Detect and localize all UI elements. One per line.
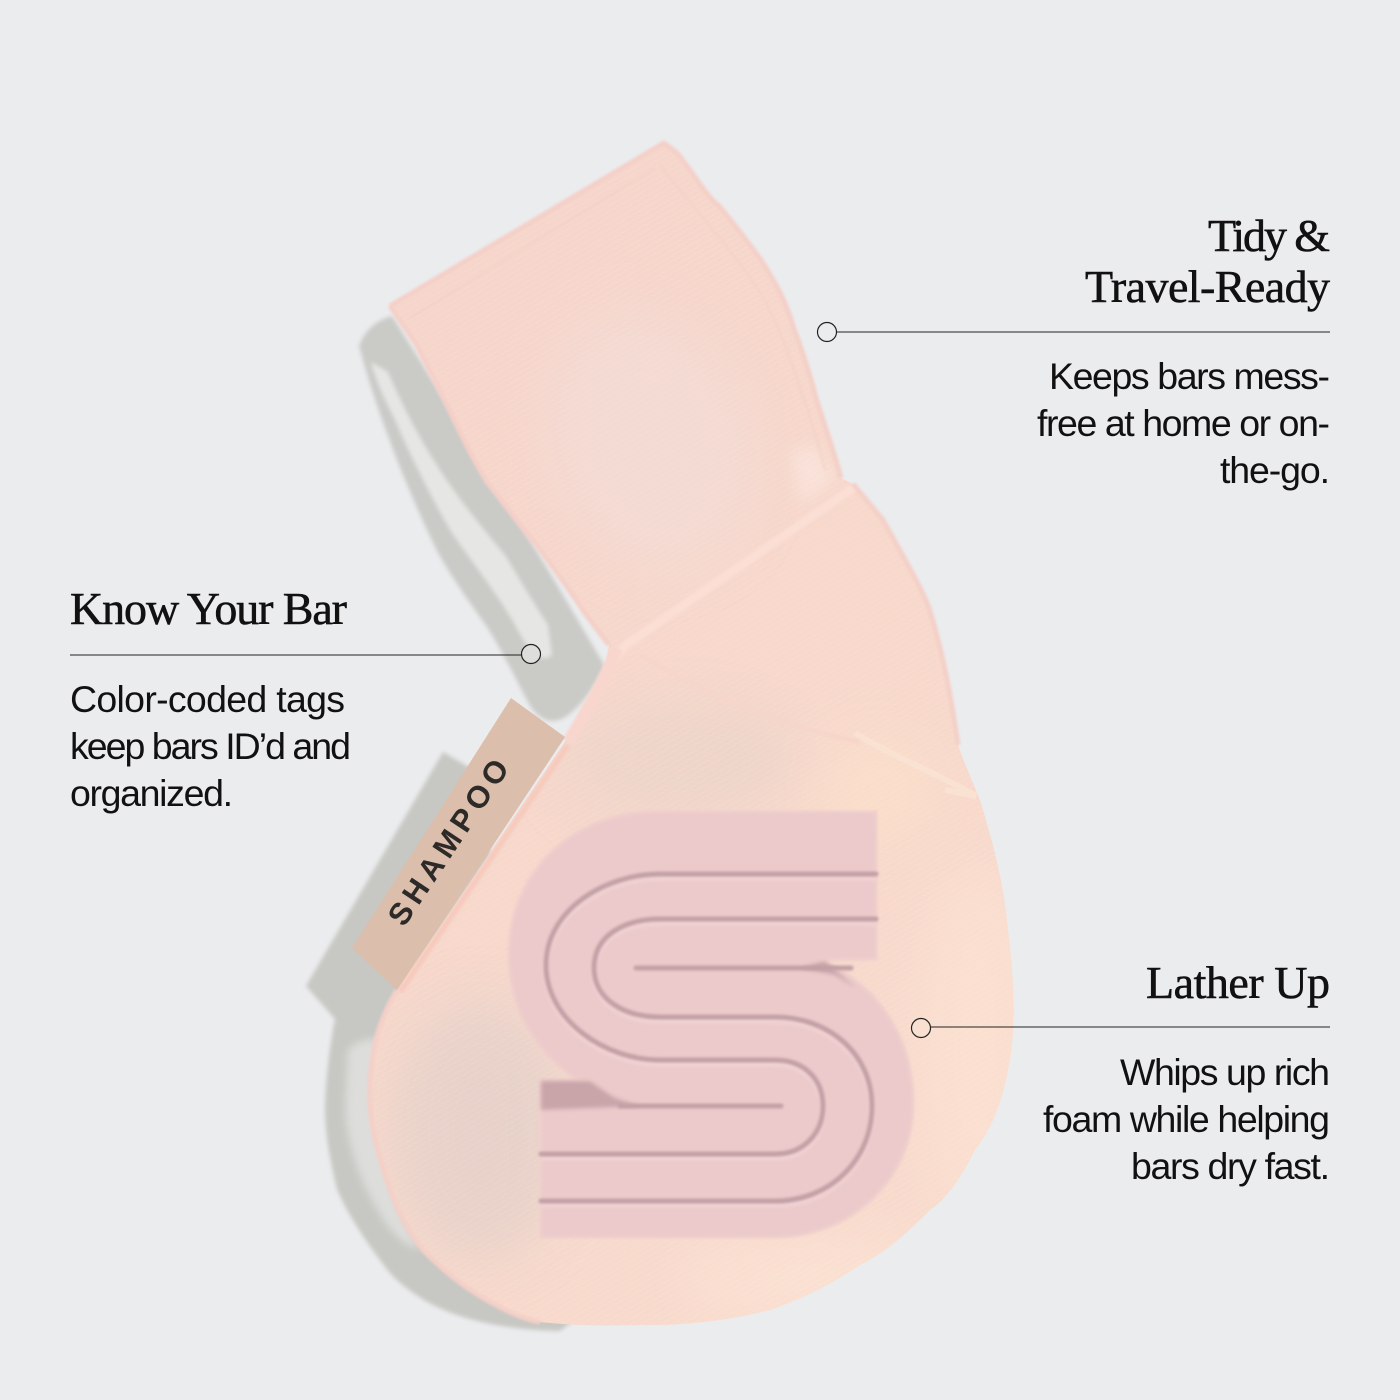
- mesh pouch body: [366, 140, 1014, 1326]
- body text: Color-coded tags: [70, 678, 345, 720]
- body text: foam while helping: [1043, 1098, 1330, 1140]
- inner fold line: [640, 655, 860, 742]
- heading: Lather Up: [1146, 957, 1330, 1008]
- left gusset seam: [568, 648, 617, 742]
- body text: Keeps bars mess-: [1049, 355, 1330, 397]
- flap inner hem: [410, 165, 825, 470]
- callout: Know Your Bar: [70, 583, 540, 814]
- body text: organized.: [70, 772, 233, 814]
- tag label: SHAMPOO: [381, 753, 516, 932]
- leader line with marker: [70, 644, 540, 664]
- heading: Travel-Ready: [1085, 261, 1330, 312]
- callout: Tidy and Travel-Ready: [818, 210, 1330, 491]
- body text: free at home or on-: [1037, 402, 1330, 444]
- bar groove highlights: [541, 878, 876, 1205]
- cross seam: [610, 488, 853, 662]
- heading: Tidy &: [1208, 210, 1330, 261]
- leader line with marker: [912, 1018, 1330, 1038]
- heading: Know Your Bar: [70, 583, 347, 634]
- left pocket stitch by tag: [400, 745, 568, 992]
- body text: Whips up rich: [1120, 1051, 1330, 1093]
- body text: [70, 678, 351, 814]
- S-shaped shampoo bar: [509, 812, 913, 1237]
- cast shadow: upper flap: [359, 316, 606, 721]
- shampoo tag: [352, 698, 565, 990]
- pouch hem stitching: [370, 143, 958, 1322]
- heading: [1085, 210, 1330, 312]
- body text: the-go.: [1220, 449, 1330, 491]
- body text: bars dry fast.: [1131, 1145, 1330, 1187]
- bar edge shading: [541, 961, 856, 1110]
- body text: [1037, 355, 1330, 491]
- product: mesh soap pouch with shampoo bar: [305, 140, 1014, 1333]
- body text: keep bars ID’d and: [70, 725, 351, 767]
- leader line with marker: [818, 322, 1330, 342]
- bar grooves: [541, 874, 876, 1201]
- callout: Lather Up: [912, 957, 1330, 1187]
- drawstring loop: [855, 733, 976, 796]
- body text: [1043, 1051, 1330, 1187]
- cast shadow: tag and lower body: [306, 752, 600, 1331]
